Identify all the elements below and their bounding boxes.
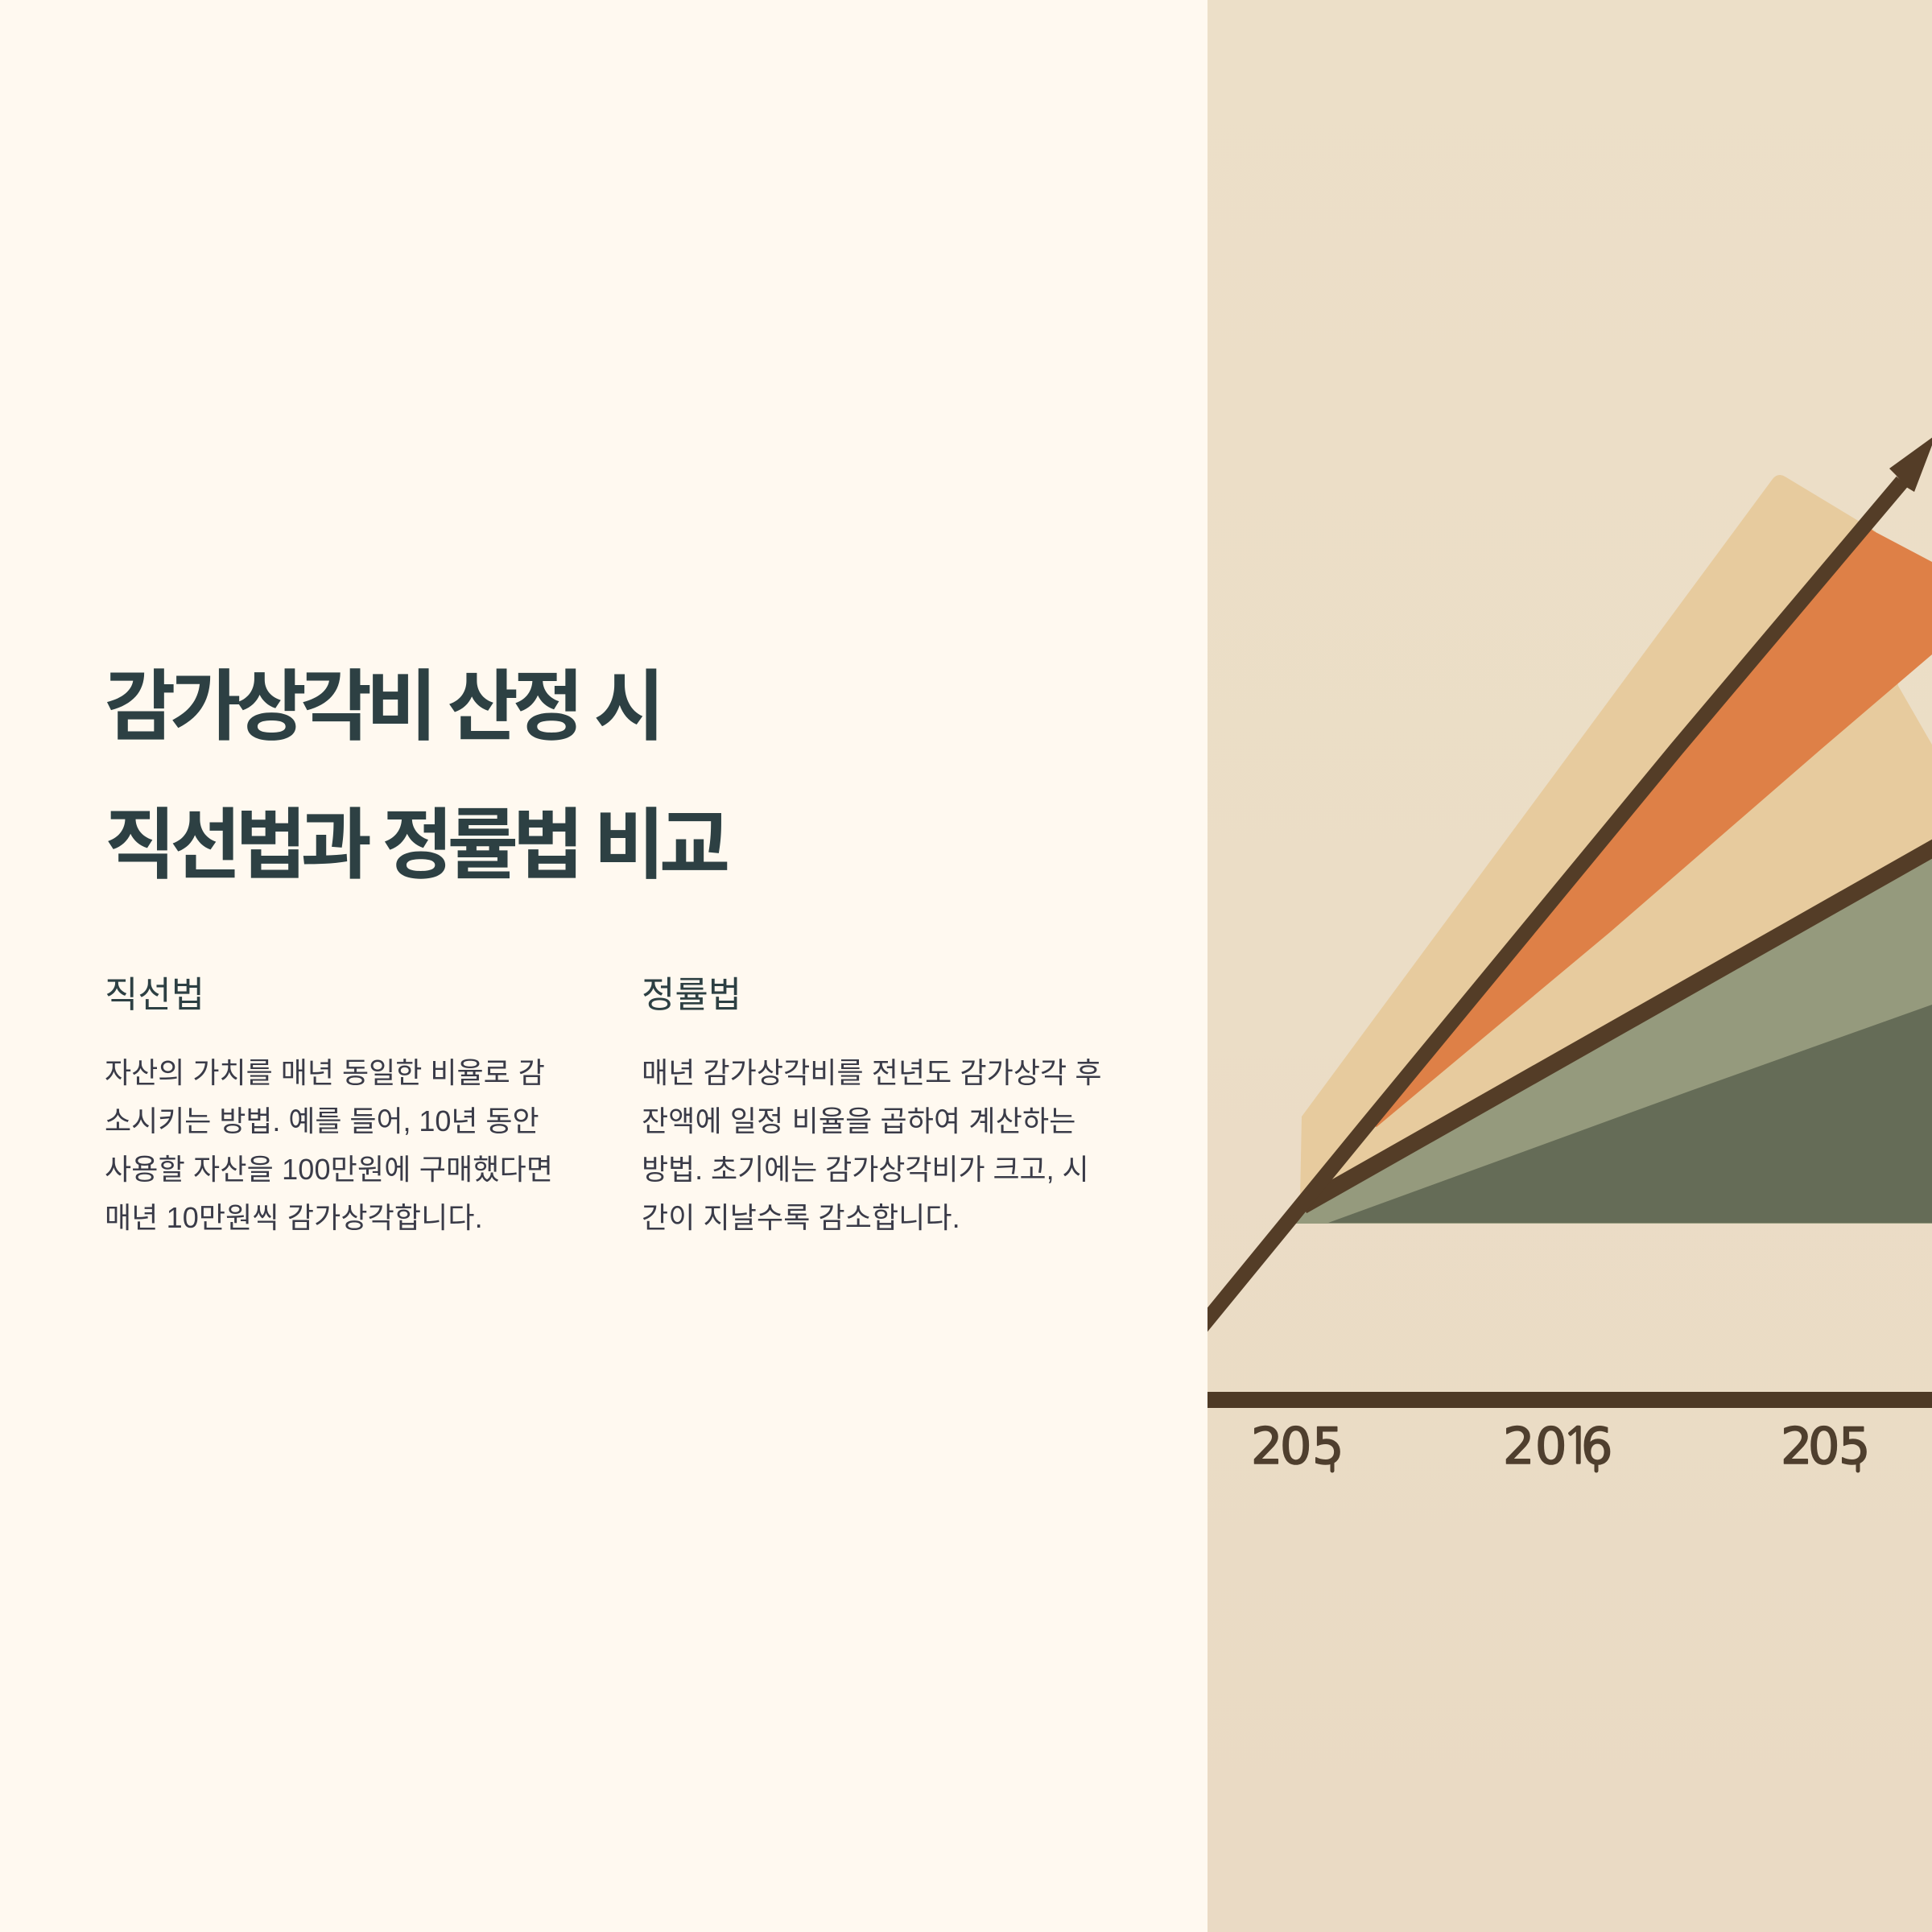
x axis xyxy=(1208,1392,1932,1408)
panel: chart illustration xyxy=(1208,0,1932,1932)
axis label: 2016 xyxy=(1503,1417,1612,1476)
chart area: light green wedge xyxy=(1293,849,1932,1224)
text block: declining-balance method description: 매년 감가상각비를 전년도 감가상각 후 xyxy=(642,1056,1102,1089)
panel: text column xyxy=(0,0,1208,1932)
axis label: 2016: 1 xyxy=(1562,1421,1592,1471)
text block: straight-line method description xyxy=(105,1056,553,1234)
axis label: 205: 205 xyxy=(1251,1417,1344,1476)
text block: straight-line method description: 소시키는 방법. 예를 들어, 10년 동안 xyxy=(105,1104,539,1137)
main trend arrow xyxy=(1198,435,1932,1331)
text block: declining-balance method description: 잔액에 일정 비율을 곱하여 계산하는 xyxy=(642,1104,1075,1137)
text block: declining-balance method description xyxy=(642,1056,1102,1234)
heading: declining-balance method: 정률법 xyxy=(642,974,741,1015)
axis label: 205: 205 xyxy=(1781,1417,1870,1476)
heading: straight-line method: 직선법 xyxy=(105,974,204,1015)
arrowhead xyxy=(1889,435,1932,492)
text block: straight-line method description: 사용할 자산을 100만원에 구매했다면 xyxy=(105,1153,553,1186)
secondary trend line xyxy=(1302,844,1932,1206)
text block: declining-balance method description: 간이 지날수록 감소합니다. xyxy=(642,1201,960,1234)
text block: straight-line method description: 자산의 가치를 매년 동일한 비율로 감 xyxy=(105,1056,545,1089)
title xyxy=(105,664,728,889)
axis label: 2016: 20 xyxy=(1503,1417,1567,1476)
title: 감가상각비 산정 시 xyxy=(105,664,659,750)
axis label: 2016: 6 xyxy=(1581,1417,1612,1476)
chart area: dark green wedge xyxy=(1328,1005,1932,1223)
text block: declining-balance method description: 방법. 초기에는 감가상각비가 크고, 시 xyxy=(642,1153,1089,1186)
chart area: beige band xyxy=(1300,475,1932,1216)
chart area: orange wedge xyxy=(1368,525,1932,1127)
title: 직선법과 정률법 비교 xyxy=(105,803,724,889)
text block: straight-line method description: 매년 10만원씩 감가상각합니다. xyxy=(105,1201,483,1234)
